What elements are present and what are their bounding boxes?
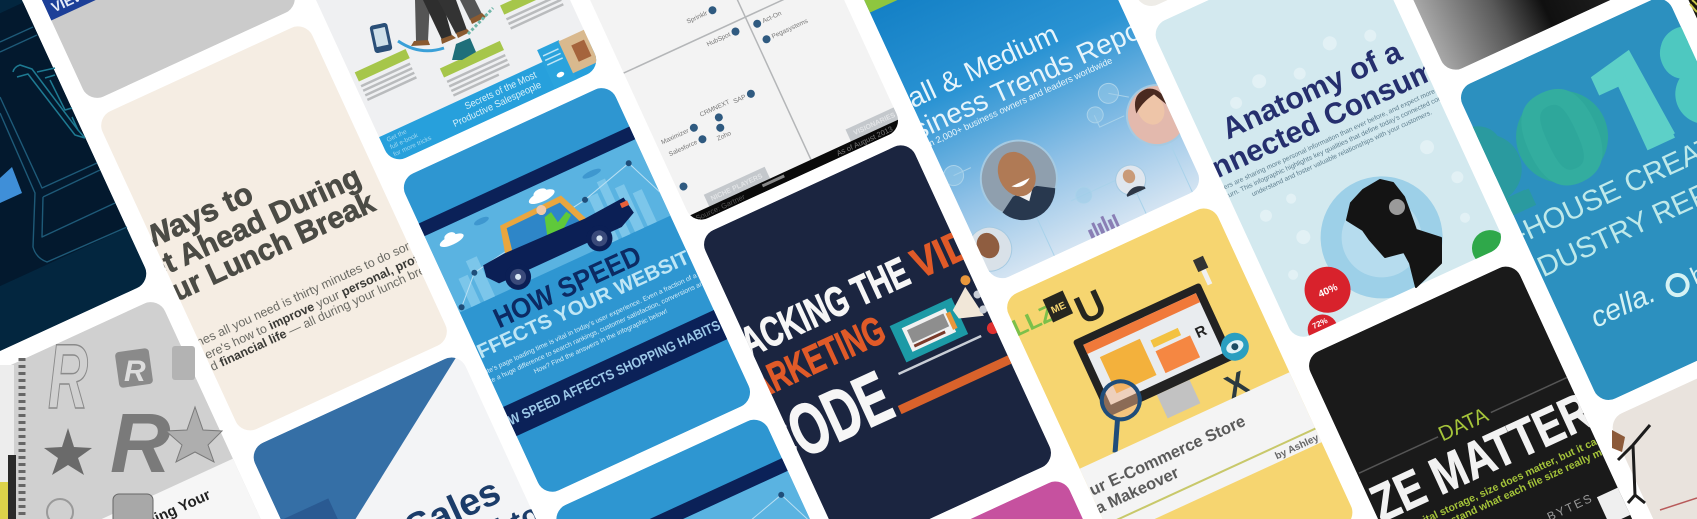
title: lunch break: Get Ahead During xyxy=(122,160,366,297)
intro text: A website's page loading time is vital in today's user experience. Even a fraction of a second xyxy=(465,262,720,385)
vendor labels: Maximizer xyxy=(660,127,691,146)
panel: secrets of salespeople card xyxy=(316,0,596,160)
blue footer band xyxy=(379,41,601,164)
title: lunch break: 9 Ways to xyxy=(113,175,258,267)
heading: affects your website: AFFECTS YOUR WEBSITE xyxy=(460,241,706,370)
icon: star outline xyxy=(166,407,222,462)
red stat bubbles xyxy=(1285,259,1369,349)
icon: truck with driver xyxy=(483,196,634,290)
panel: 2018 in-house creative report card xyxy=(1404,0,1697,429)
panel: e-commerce makeover card xyxy=(948,203,1358,519)
green banners with text lines xyxy=(354,0,564,101)
panel: quadrant chart card: NICHE PLAYERS xyxy=(710,173,764,203)
numerals: 2018 xyxy=(1409,0,1697,264)
panel: quadrant chart card: VISIONARIES xyxy=(853,112,897,137)
icon: r in square: R xyxy=(124,355,146,388)
icon: r outline sketch: R xyxy=(48,326,88,428)
small text block in footer xyxy=(542,48,564,78)
panel: how speed affects your website card xyxy=(404,88,750,492)
quadrant axes xyxy=(624,0,812,160)
sketchbook binding xyxy=(18,358,26,519)
footer small text: full e-book xyxy=(389,132,420,151)
red stat bubbles: 72% xyxy=(1311,316,1329,331)
red line on cream card xyxy=(1660,498,1697,510)
head circle xyxy=(1301,156,1463,318)
icon: monitor xyxy=(1073,282,1246,441)
footer notes: As of August 2013 xyxy=(835,124,894,158)
tag: me: ME xyxy=(1050,300,1068,316)
icon: shopping cart frame xyxy=(0,27,127,262)
vendor labels: Zoho xyxy=(716,130,733,143)
body text: in return. This infographic highlights key qualities that define today's connected consumers xyxy=(1213,85,1464,206)
intro text: How? Find the answers in the infographic below! xyxy=(533,308,669,375)
title: hacking the video marketing code xyxy=(744,232,964,454)
navy band with subheading xyxy=(503,310,727,436)
glow on head xyxy=(1389,199,1405,215)
title: lunch break: Your Lunch Break xyxy=(133,186,380,323)
panel: sales scorecard card xyxy=(254,358,536,519)
panel: video marketing card xyxy=(704,145,1051,519)
network connectors xyxy=(948,79,1192,281)
vendor labels xyxy=(661,11,808,156)
title: anatomy: Anatomy of a xyxy=(1217,35,1407,146)
vendor labels: SAP xyxy=(732,94,747,105)
numerals: 2018: 0 xyxy=(1492,50,1633,225)
blurred pen xyxy=(0,365,14,519)
skyline bars xyxy=(458,178,657,307)
figure hair xyxy=(1612,430,1625,452)
vendor labels: Salesforce xyxy=(668,139,699,158)
body text: and financial life — all during your lunch break. xyxy=(195,256,443,380)
vendor labels: Sprinklr xyxy=(686,10,709,26)
figure on cream card xyxy=(1618,425,1650,503)
icon: eye xyxy=(1216,328,1253,365)
tag: me xyxy=(1043,291,1073,322)
sketchbook drawings xyxy=(0,326,222,519)
icon: r 3d: R xyxy=(110,396,171,490)
icon: shopping cart handle xyxy=(13,65,85,138)
black footer xyxy=(689,119,903,225)
portrait: smiling man xyxy=(968,128,1071,233)
title: hacking the video marketing code: HACKING THE xyxy=(714,248,916,375)
icon: monitor: R xyxy=(1193,322,1210,342)
footer small text xyxy=(386,130,432,156)
footer heading: Productive Salespeople xyxy=(451,80,544,130)
title panel xyxy=(1080,372,1322,519)
panel: pink card xyxy=(970,482,1083,519)
title: business trends xyxy=(910,26,1136,146)
icon: pencil xyxy=(1193,256,1215,287)
letter: u: U xyxy=(1068,281,1113,333)
icon: faded square xyxy=(172,346,195,380)
title: business trends: Business Trends Report xyxy=(876,7,1161,160)
footer notes: Source: Gartner xyxy=(694,192,747,223)
orange underline xyxy=(898,355,1011,414)
blue block in cart xyxy=(0,167,22,203)
icon: laptop with megaphone xyxy=(890,275,998,362)
portrait: small man xyxy=(1111,160,1151,200)
panel: lunch break card xyxy=(101,26,447,430)
title: hacking the video marketing code: VIDEO xyxy=(904,198,1025,287)
vendor labels: Pegasystems xyxy=(771,17,810,40)
heading: how speed: HOW SPEED xyxy=(489,239,646,334)
quadrant labels xyxy=(704,167,770,207)
icon: rounded sketch square xyxy=(113,494,153,519)
title: business trends: from 2,000+ business owners and leaders worldwide xyxy=(915,55,1114,154)
skyline xyxy=(1085,211,1120,239)
icon: r in square xyxy=(115,348,153,388)
heading: data: DATA xyxy=(1435,404,1492,446)
panel: black and yellow card at far right xyxy=(1644,0,1697,268)
portrait: woman xyxy=(1117,75,1197,155)
numerals: 2018: 2 xyxy=(1409,89,1549,264)
small icon circles xyxy=(936,80,1155,252)
panel: dark photo card xyxy=(1302,0,1659,75)
icon: magnifier xyxy=(1088,375,1157,452)
vendor dots xyxy=(680,6,771,190)
title: hacking the video marketing code: MARKETING xyxy=(722,308,892,418)
panel: anatomy of a connected consumer card xyxy=(1112,0,1546,373)
footer heading: Secrets of the Most xyxy=(463,70,539,112)
panel: grey card with blue header xyxy=(42,0,295,98)
vendor labels: Act-On xyxy=(761,10,783,25)
illustration: salesperson legs and devices xyxy=(369,0,493,60)
letter: x: X xyxy=(1219,363,1254,405)
footer notes xyxy=(694,124,894,223)
panel: dark shopping cart card xyxy=(0,0,146,351)
green bubble xyxy=(1466,224,1514,272)
logo: second brand xyxy=(1663,258,1697,301)
clouds xyxy=(440,188,555,247)
panel: second speed card xyxy=(556,420,810,519)
body text: Sometimes all you need is thirty minutes to do some xyxy=(155,234,424,367)
logo: cella: cella. xyxy=(1586,277,1661,334)
panel: e-commerce makeover card: by Ashley xyxy=(1273,432,1321,462)
line chart dots xyxy=(458,160,660,310)
body text: Here's how to improve your personal, professional xyxy=(194,231,466,366)
panel: cream figure card xyxy=(1607,323,1697,519)
title: business trends: Small & Medium xyxy=(864,18,1063,131)
footer small text: Get the xyxy=(386,128,408,144)
panel: quadrant chart card xyxy=(590,0,898,220)
silhouette: head profile xyxy=(1347,180,1441,287)
portrait: lower-left woman xyxy=(961,220,1019,278)
vendor labels: HubSpot xyxy=(706,31,732,48)
letters: allz: LLZ xyxy=(1008,299,1059,342)
panel: how speed affects your website card: HOW SPEED AFFECTS SHOPPING HABITS xyxy=(489,317,723,436)
body text: Consumers are sharing more personal information than ever before, and expect more, more often xyxy=(1200,73,1470,202)
red stat bubbles: 40% xyxy=(1317,282,1340,300)
panel: logo sketch card xyxy=(11,302,260,519)
footer small text: for more tricks xyxy=(392,134,433,158)
title: hacking the video marketing code: CODE xyxy=(744,357,904,488)
panel: light card above anatomy xyxy=(998,0,1354,11)
body text: understand and foster valuable relationships with your customers. xyxy=(1251,109,1433,198)
title: anatomy: Connected Consumer xyxy=(1170,41,1467,202)
icon: sketch circle xyxy=(47,499,73,519)
vendor labels: CRMNEXT xyxy=(699,99,731,119)
panel: small and medium business trends card xyxy=(864,0,1199,278)
intro text: can make a huge difference to search rankings, customer satisfaction, conversions and sales. xyxy=(467,271,726,395)
yellow swirl on far-right card xyxy=(1690,0,1697,12)
icon: star dark xyxy=(44,428,92,475)
panel: data size matters card xyxy=(1269,247,1691,519)
dotted background xyxy=(1203,9,1482,300)
